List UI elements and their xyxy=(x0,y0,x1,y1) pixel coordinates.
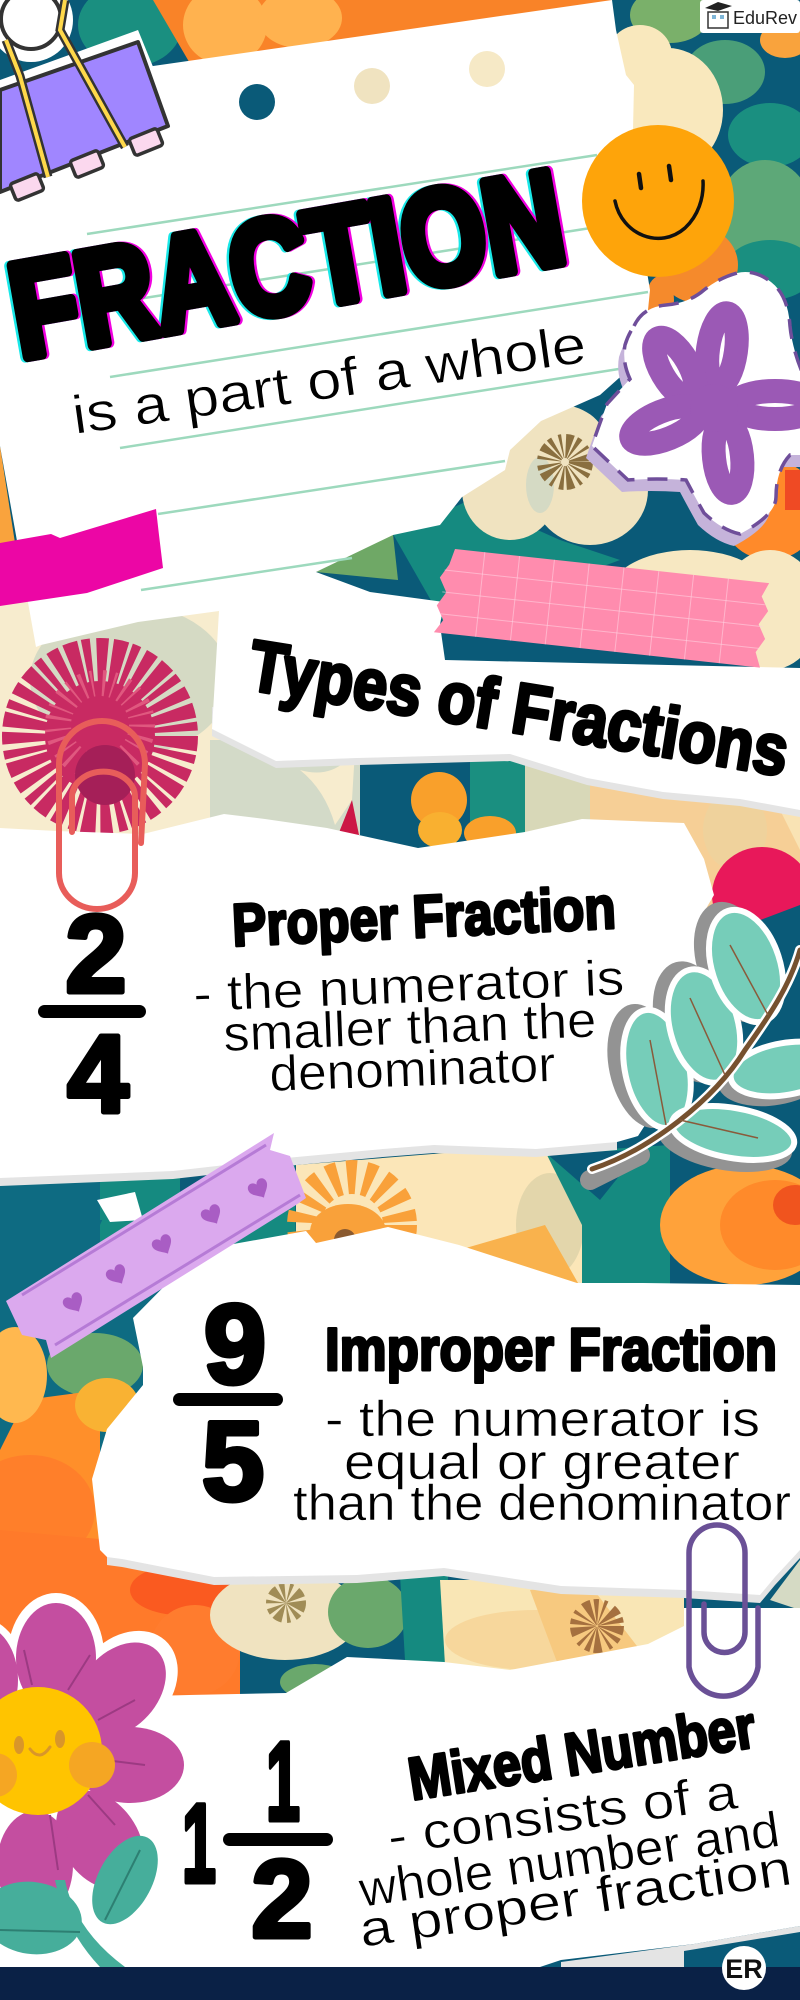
footer bar xyxy=(0,1967,800,2000)
magenta tape xyxy=(0,509,163,606)
title: FRACTION: FRACTION xyxy=(2,142,577,386)
fraction 1 1/2 xyxy=(182,1719,333,1961)
fraction 2/4: 2 xyxy=(65,893,127,1016)
description: mixed number xyxy=(354,1763,795,1958)
subtitle: is a part of a whole xyxy=(68,314,590,446)
description: improper fraction: equal or greater xyxy=(344,1434,740,1490)
description: proper fraction: smaller than the xyxy=(222,992,597,1062)
icon: pink flower with smile xyxy=(0,1593,199,1967)
fraction 9/5: 9 xyxy=(204,1282,266,1407)
ER badge: ER xyxy=(725,1954,763,1984)
description: proper fraction xyxy=(192,949,625,1102)
fraction 9/5: 5 xyxy=(202,1399,264,1524)
lower-left cream panel xyxy=(0,600,225,840)
purple flower sticker xyxy=(586,272,800,546)
punch holes xyxy=(239,51,505,120)
description: mixed number: whole number and xyxy=(354,1801,783,1918)
fraction 2/4: 4 xyxy=(67,1013,129,1136)
torn white band: Improper Fraction xyxy=(92,1227,800,1603)
description: improper fraction xyxy=(293,1391,791,1531)
description: improper fraction: than the denominator xyxy=(293,1475,791,1531)
fraction 1 1/2: 2 xyxy=(251,1838,313,1961)
title: FRACTION: FRACTION xyxy=(0,143,572,387)
description: proper fraction: denominator xyxy=(268,1036,556,1102)
ruled lines xyxy=(87,155,648,590)
icon: purple paperclip xyxy=(689,1525,758,1696)
EduRev logo xyxy=(700,0,800,33)
torn white paper: title sheet and Types band xyxy=(0,0,800,817)
fraction 2/4 xyxy=(38,893,146,1136)
lower strip flora xyxy=(210,1570,360,1660)
fraction 9/5 xyxy=(173,1282,283,1524)
pink grid tape xyxy=(434,548,771,668)
left orange column xyxy=(0,1290,160,1640)
smiley sticker xyxy=(582,125,734,277)
ER badge xyxy=(722,1946,766,1990)
binder clip xyxy=(0,0,178,205)
icon: red flower xyxy=(24,660,176,812)
description: proper fraction: - the numerator is xyxy=(192,949,625,1022)
icon: washi tape with hearts xyxy=(6,1133,306,1358)
icon: salmon paperclip xyxy=(59,721,145,909)
mid band flora xyxy=(0,1170,180,1310)
torn white band: Proper Fraction xyxy=(0,814,714,1186)
description: mixed number: - consists of a xyxy=(384,1763,741,1865)
icon: teal leaf branch xyxy=(590,892,800,1181)
heading: Proper Fraction: Proper Fraction xyxy=(230,874,617,959)
description: improper fraction: - the numerator is xyxy=(325,1391,760,1447)
description: mixed number: a proper fraction xyxy=(356,1840,795,1958)
EduRev logo: EduRev xyxy=(733,8,797,28)
fraction 1 1/2: 1 xyxy=(266,1719,300,1844)
torn white band: Mixed Number xyxy=(0,1608,800,1967)
fraction 1 1/2: 1 xyxy=(182,1781,216,1906)
title: FRACTION: FRACTION xyxy=(0,143,575,387)
